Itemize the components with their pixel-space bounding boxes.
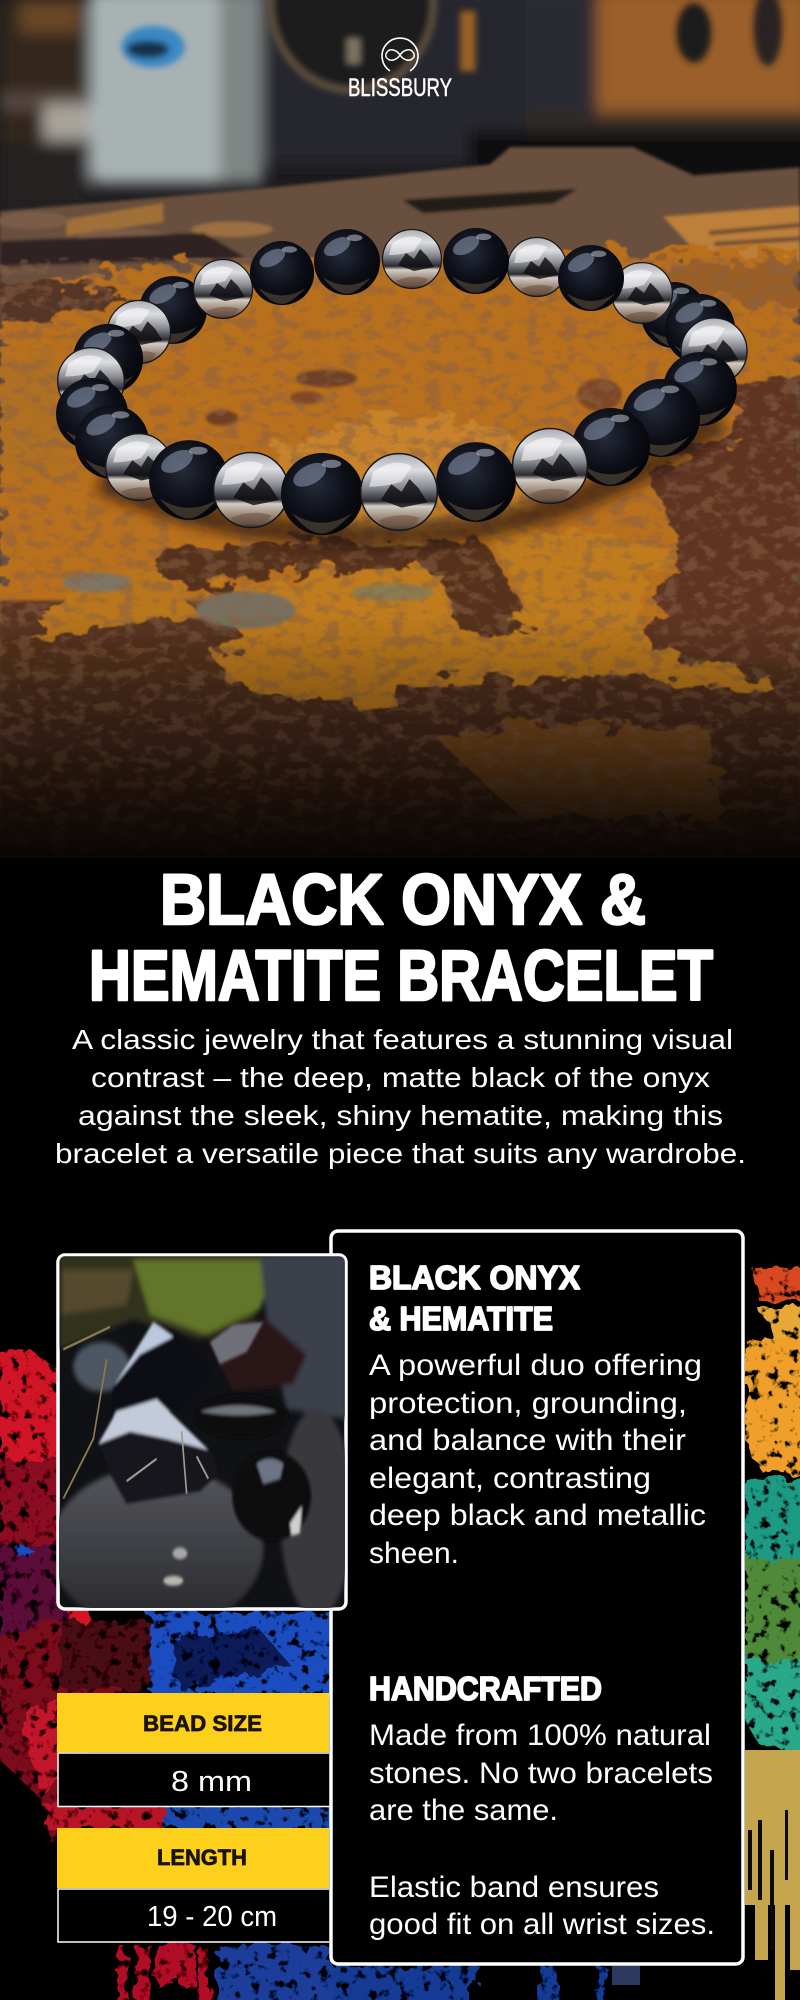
spec table: bead size bbox=[57, 1693, 329, 1806]
icon: infinity in circle bbox=[382, 38, 418, 71]
heading: black onyx & hematite bbox=[369, 1259, 580, 1337]
intro paragraph: contrast – the deep, matte black of the onyx bbox=[91, 1062, 710, 1093]
value: 8 mm bbox=[58, 1753, 329, 1806]
text: handcrafted description: are the same. bbox=[369, 1794, 558, 1827]
value: 19 - 20 cm: 19 - 20 cm bbox=[147, 1901, 277, 1933]
text: handcrafted description bbox=[369, 1719, 715, 1941]
text: handcrafted description: stones. No two bracelets bbox=[369, 1757, 713, 1790]
label: bead size bbox=[57, 1693, 329, 1752]
label: bead size: BEAD SIZE bbox=[143, 1711, 262, 1736]
label: length bbox=[57, 1828, 329, 1888]
text: onyx description bbox=[369, 1349, 706, 1570]
value: 19 - 20 cm bbox=[58, 1889, 329, 1942]
photo: black onyx stones bbox=[50, 1255, 353, 1630]
text: onyx description: A powerful duo offering bbox=[369, 1349, 702, 1382]
value: 8 mm: 8 mm bbox=[171, 1766, 252, 1798]
title bbox=[89, 861, 713, 1016]
label: length: LENGTH bbox=[157, 1845, 247, 1870]
intro paragraph: bracelet a versatile piece that suits any wardrobe. bbox=[55, 1138, 746, 1169]
shadow under bracelet bbox=[100, 420, 720, 535]
title: BLACK ONYX & bbox=[160, 861, 646, 940]
text: onyx description: elegant, contrasting bbox=[369, 1462, 651, 1495]
paint splash: left and bottom bbox=[0, 1349, 640, 2000]
logo: Blissbury: BLISSBURY bbox=[348, 74, 452, 102]
heading: handcrafted: HANDCRAFTED bbox=[369, 1670, 602, 1707]
hero photo: rusted metal surface bbox=[0, 0, 800, 858]
text: handcrafted description: good fit on all wrist sizes. bbox=[369, 1908, 715, 1941]
intro paragraph: against the sleek, shiny hematite, making this bbox=[78, 1100, 723, 1131]
paint splash: right side bbox=[745, 1268, 800, 2000]
logo: Blissbury bbox=[348, 38, 452, 102]
text: handcrafted description: Made from 100% natural bbox=[369, 1719, 711, 1752]
intro paragraph: A classic jewelry that features a stunning visual bbox=[72, 1024, 733, 1055]
intro paragraph bbox=[55, 1024, 746, 1169]
panel: features bbox=[331, 1231, 743, 1964]
heading: black onyx & hematite: BLACK ONYX bbox=[369, 1259, 580, 1296]
spec table: length bbox=[57, 1828, 329, 1942]
text: onyx description: and balance with their bbox=[369, 1424, 686, 1457]
heading: black onyx & hematite: & HEMATITE bbox=[369, 1300, 553, 1337]
text: onyx description: protection, grounding, bbox=[369, 1387, 687, 1420]
text: onyx description: deep black and metallic bbox=[369, 1499, 706, 1532]
text: onyx description: sheen. bbox=[369, 1537, 459, 1570]
bracelet of onyx and hematite beads bbox=[56, 228, 748, 535]
text: handcrafted description: Elastic band ensures bbox=[369, 1871, 659, 1904]
